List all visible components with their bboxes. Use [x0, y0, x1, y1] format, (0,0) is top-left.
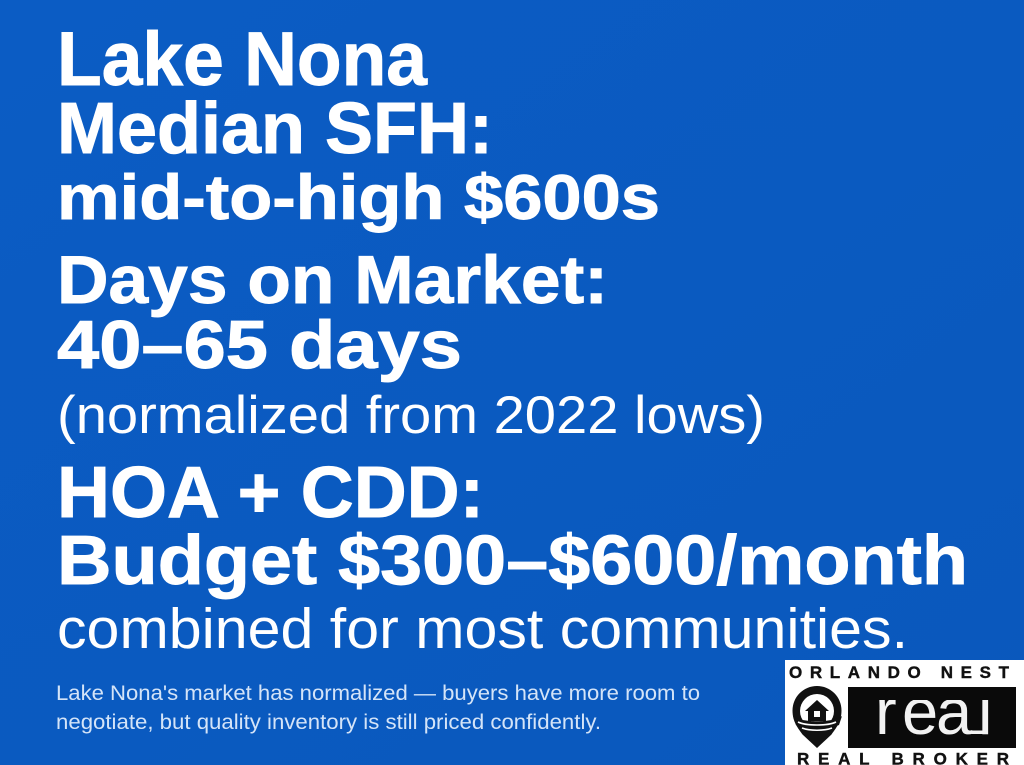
footnote text	[56, 682, 700, 734]
logo top label: ORLANDO NEST	[789, 663, 1010, 682]
heading: Lake Nona median single-family home price	[57, 17, 660, 233]
heading: Lake Nona median single-family home price: mid-to-high $600s	[57, 163, 660, 233]
heading: Lake Nona median single-family home price: Median SFH:	[57, 89, 493, 169]
text block: days on market: Days on Market:	[57, 242, 608, 318]
heading: Lake Nona median single-family home price: Lake Nona	[57, 17, 428, 102]
text block: HOA and CDD budget: combined for most communities.	[57, 597, 908, 661]
text block: HOA and CDD budget	[57, 453, 968, 661]
text block: HOA and CDD budget: Budget $300–$600/month	[57, 521, 968, 599]
icon: map pin with house in nest	[792, 686, 842, 748]
logo black panel with real wordmark	[848, 687, 1016, 748]
text block: days on market: 40–65 days	[57, 307, 462, 383]
logo: Orlando Nest Real Broker	[785, 660, 1024, 765]
text block: HOA and CDD budget: HOA + CDD:	[57, 453, 484, 533]
text block: days on market: (normalized from 2022 lows)	[57, 386, 765, 445]
footnote text: negotiate, but quality inventory is still priced confidently.	[56, 711, 601, 734]
footnote text: Lake Nona's market has normalized — buyers have more room to	[56, 682, 700, 705]
text block: days on market	[57, 242, 765, 445]
logo black panel with real wordmark: real	[875, 675, 992, 748]
